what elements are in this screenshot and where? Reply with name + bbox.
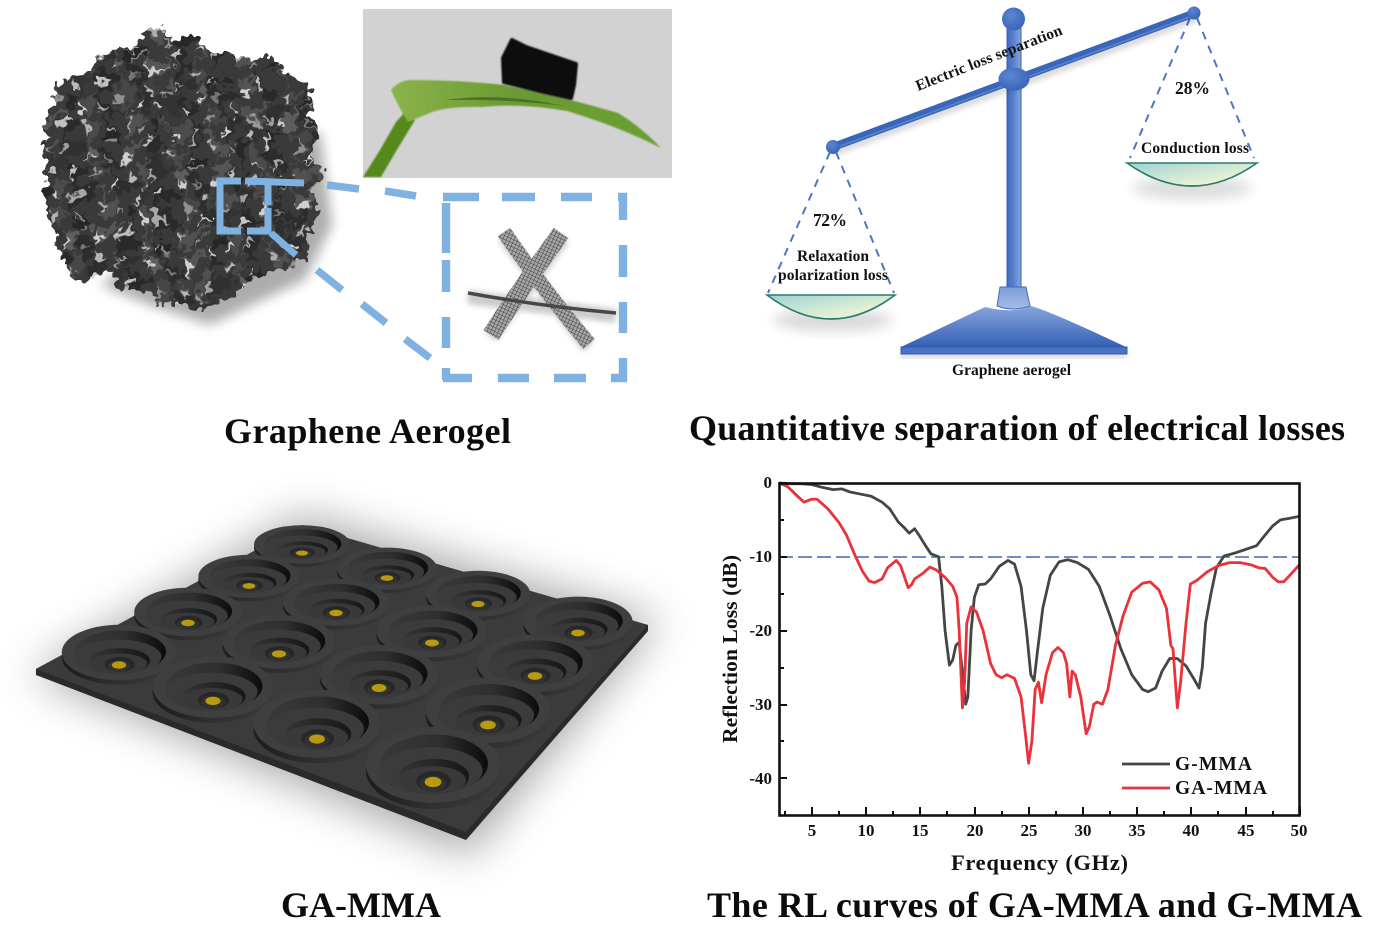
y axis numbers: -40 <box>749 769 772 788</box>
line chart: reflection loss curves <box>718 473 1308 875</box>
right pan label: Conduction loss <box>1141 140 1249 157</box>
heading: Quantitative separation of electrical losses: Quantitative separation of electrical losses <box>689 408 1345 448</box>
x axis numbers: 30 <box>1074 821 1092 840</box>
y axis numbers: -30 <box>749 695 772 714</box>
x axis numbers: 35 <box>1128 821 1146 840</box>
left pan label: polarization loss <box>778 267 888 284</box>
x axis numbers: 20 <box>966 821 984 840</box>
right pan <box>1127 163 1257 200</box>
heading: GA-MMA: GA-MMA <box>281 885 441 925</box>
y axis numbers: 0 <box>764 473 772 492</box>
y axis numbers: -10 <box>749 547 772 566</box>
x axis numbers: 45 <box>1238 821 1254 840</box>
dashed zoom lines <box>317 185 430 358</box>
plate <box>36 525 648 840</box>
dashed pan strings <box>768 18 1254 293</box>
left percentage: 72% <box>813 210 847 230</box>
x axis numbers: 10 <box>858 821 874 840</box>
right percentage: 28% <box>1175 78 1210 98</box>
y axis numbers: -20 <box>749 621 772 640</box>
base label: Graphene aerogel <box>952 362 1072 379</box>
x axis numbers: 25 <box>1020 821 1038 840</box>
GA-MMA curve <box>779 483 1300 763</box>
heading: Graphene Aerogel: Graphene Aerogel <box>224 411 511 451</box>
aerogel cube <box>41 32 317 308</box>
stand pole <box>1002 8 1025 290</box>
x axis numbers: 5 <box>808 821 816 840</box>
left pan label <box>778 248 888 284</box>
x axis numbers: 15 <box>912 821 928 840</box>
y axis title: Reflection Loss (dB) <box>718 555 742 743</box>
aerogel cube shadow <box>100 130 332 325</box>
threshold line at -10 dB <box>779 556 1300 558</box>
plate shadow <box>30 515 660 855</box>
x axis numbers <box>808 821 1308 840</box>
panel: graphene aerogel <box>41 9 672 381</box>
balance beam <box>826 6 1200 154</box>
x axis title: Frequency (GHz) <box>951 850 1128 875</box>
x axis numbers: 40 <box>1182 821 1200 840</box>
zoom selection square <box>220 181 304 255</box>
panel: balance scale diagram <box>767 6 1257 379</box>
legend <box>1122 754 1267 799</box>
dashed zoom box <box>443 193 627 381</box>
legend: G-MMA <box>1175 754 1252 775</box>
left pan <box>767 295 895 332</box>
G-MMA curve <box>779 483 1300 704</box>
stand base <box>900 287 1127 358</box>
y axis numbers <box>749 473 772 788</box>
well array <box>62 525 633 809</box>
panel: GA-MMA absorber <box>30 515 660 855</box>
legend: GA-MMA <box>1175 778 1267 799</box>
plot frame and ticks <box>779 483 1300 816</box>
graphene tube network <box>468 232 616 347</box>
heading: The RL curves: The RL curves of GA-MMA and G-MMA <box>707 885 1362 925</box>
x axis numbers: 50 <box>1290 821 1308 840</box>
beam label: Electric loss separation <box>913 22 1065 95</box>
photo: aerogel on a leaf <box>363 9 672 178</box>
left pan label: Relaxation <box>797 248 869 265</box>
